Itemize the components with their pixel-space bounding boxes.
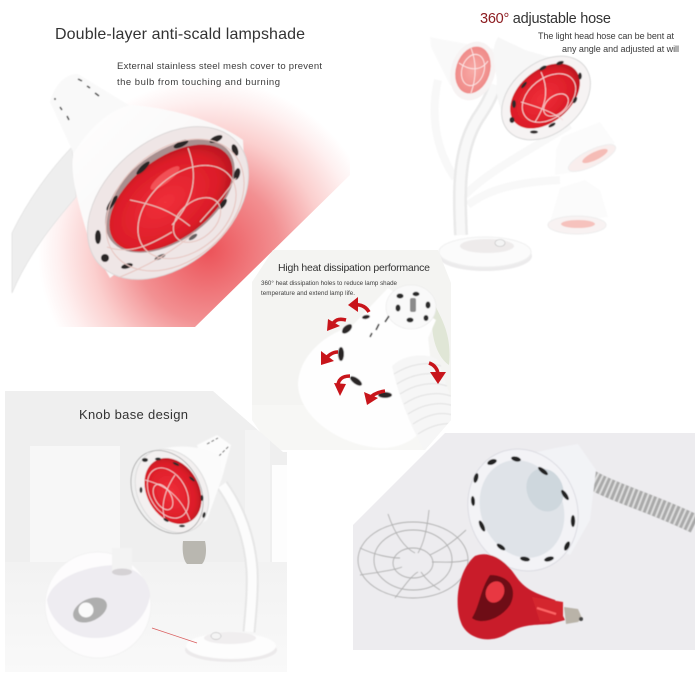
grey hose (585, 476, 695, 524)
red glow background (49, 91, 348, 327)
rim (121, 436, 223, 546)
ghost lamp left (430, 36, 503, 106)
main hose (460, 85, 495, 235)
inset: knob close-up (45, 548, 151, 658)
shade body (298, 326, 430, 448)
red bulb (458, 554, 565, 639)
photo: upturned lamp shade (298, 288, 451, 448)
neck slots (370, 316, 389, 337)
panel: heat dissipation (252, 250, 460, 452)
main lamp rim holes (510, 60, 582, 134)
octagon background (252, 250, 451, 450)
bulb (133, 448, 213, 534)
red bulb (90, 123, 252, 273)
photo: lamp with knob base (116, 435, 277, 662)
bulb shadow (84, 116, 256, 276)
top cap with holes (386, 290, 436, 329)
description (117, 61, 322, 88)
panel: adjustable hose (430, 11, 679, 271)
floor (252, 405, 452, 450)
corrugated hose (423, 360, 429, 372)
pointer line (152, 628, 197, 643)
wall panel (30, 446, 120, 564)
bulb screw cap (564, 607, 582, 624)
wire mesh guard (80, 112, 270, 298)
description (261, 280, 398, 297)
floor (5, 562, 287, 672)
heading: High heat dissipation performance (278, 262, 430, 274)
rim vent holes (95, 133, 241, 270)
rim holes (140, 458, 206, 527)
bulb neck (532, 597, 563, 622)
plant (432, 305, 450, 365)
description: External stainless steel mesh cover to prevent (117, 61, 322, 72)
shade vent holes (337, 314, 392, 399)
heading: Double-layer anti-scald lampshade (55, 26, 305, 43)
main lamp (494, 37, 584, 135)
vase (183, 541, 206, 564)
base (185, 638, 277, 662)
background (353, 433, 695, 650)
photo: parts (358, 432, 695, 639)
neck vent slots (55, 79, 99, 120)
heading: 360° adjustable hose (480, 11, 611, 27)
photo: lamp close-up (12, 74, 278, 310)
description: The light head hose can be bent at (538, 31, 674, 41)
hose (222, 485, 252, 632)
rim (58, 96, 278, 310)
ghost lamp bottom (548, 180, 608, 234)
description: temperature and extend lamp life. (261, 290, 355, 297)
room background (5, 391, 287, 640)
inner shade (480, 460, 564, 558)
red airflow arrows (325, 305, 438, 399)
description: 360° heat dissipation holes to reduce lamp shade (261, 280, 398, 287)
knob (495, 240, 505, 246)
shade outer (579, 468, 596, 492)
ghost lamp lower right (555, 122, 619, 177)
panel: double-layer lampshade (12, 26, 350, 327)
neck (197, 435, 231, 478)
hose (12, 147, 76, 293)
lamp neck (50, 74, 132, 170)
shade (147, 447, 222, 530)
panel: disassembled lamp parts (353, 432, 695, 650)
wire guard (358, 510, 468, 598)
rim holes (471, 455, 575, 563)
description (538, 31, 679, 54)
inset knob plate (69, 592, 111, 628)
description: any angle and adjusted at will (562, 44, 679, 54)
inset hose (112, 548, 132, 573)
description: the bulb from touching and burning (117, 77, 280, 88)
rim (468, 448, 579, 572)
photo: lamp with bending positions (430, 36, 619, 271)
ghost hoses (435, 80, 570, 205)
lamp shade body (72, 105, 245, 278)
wire guard (116, 437, 218, 547)
panel: knob base design (5, 391, 287, 672)
base (438, 241, 532, 271)
heading: Knob base design (79, 407, 188, 422)
